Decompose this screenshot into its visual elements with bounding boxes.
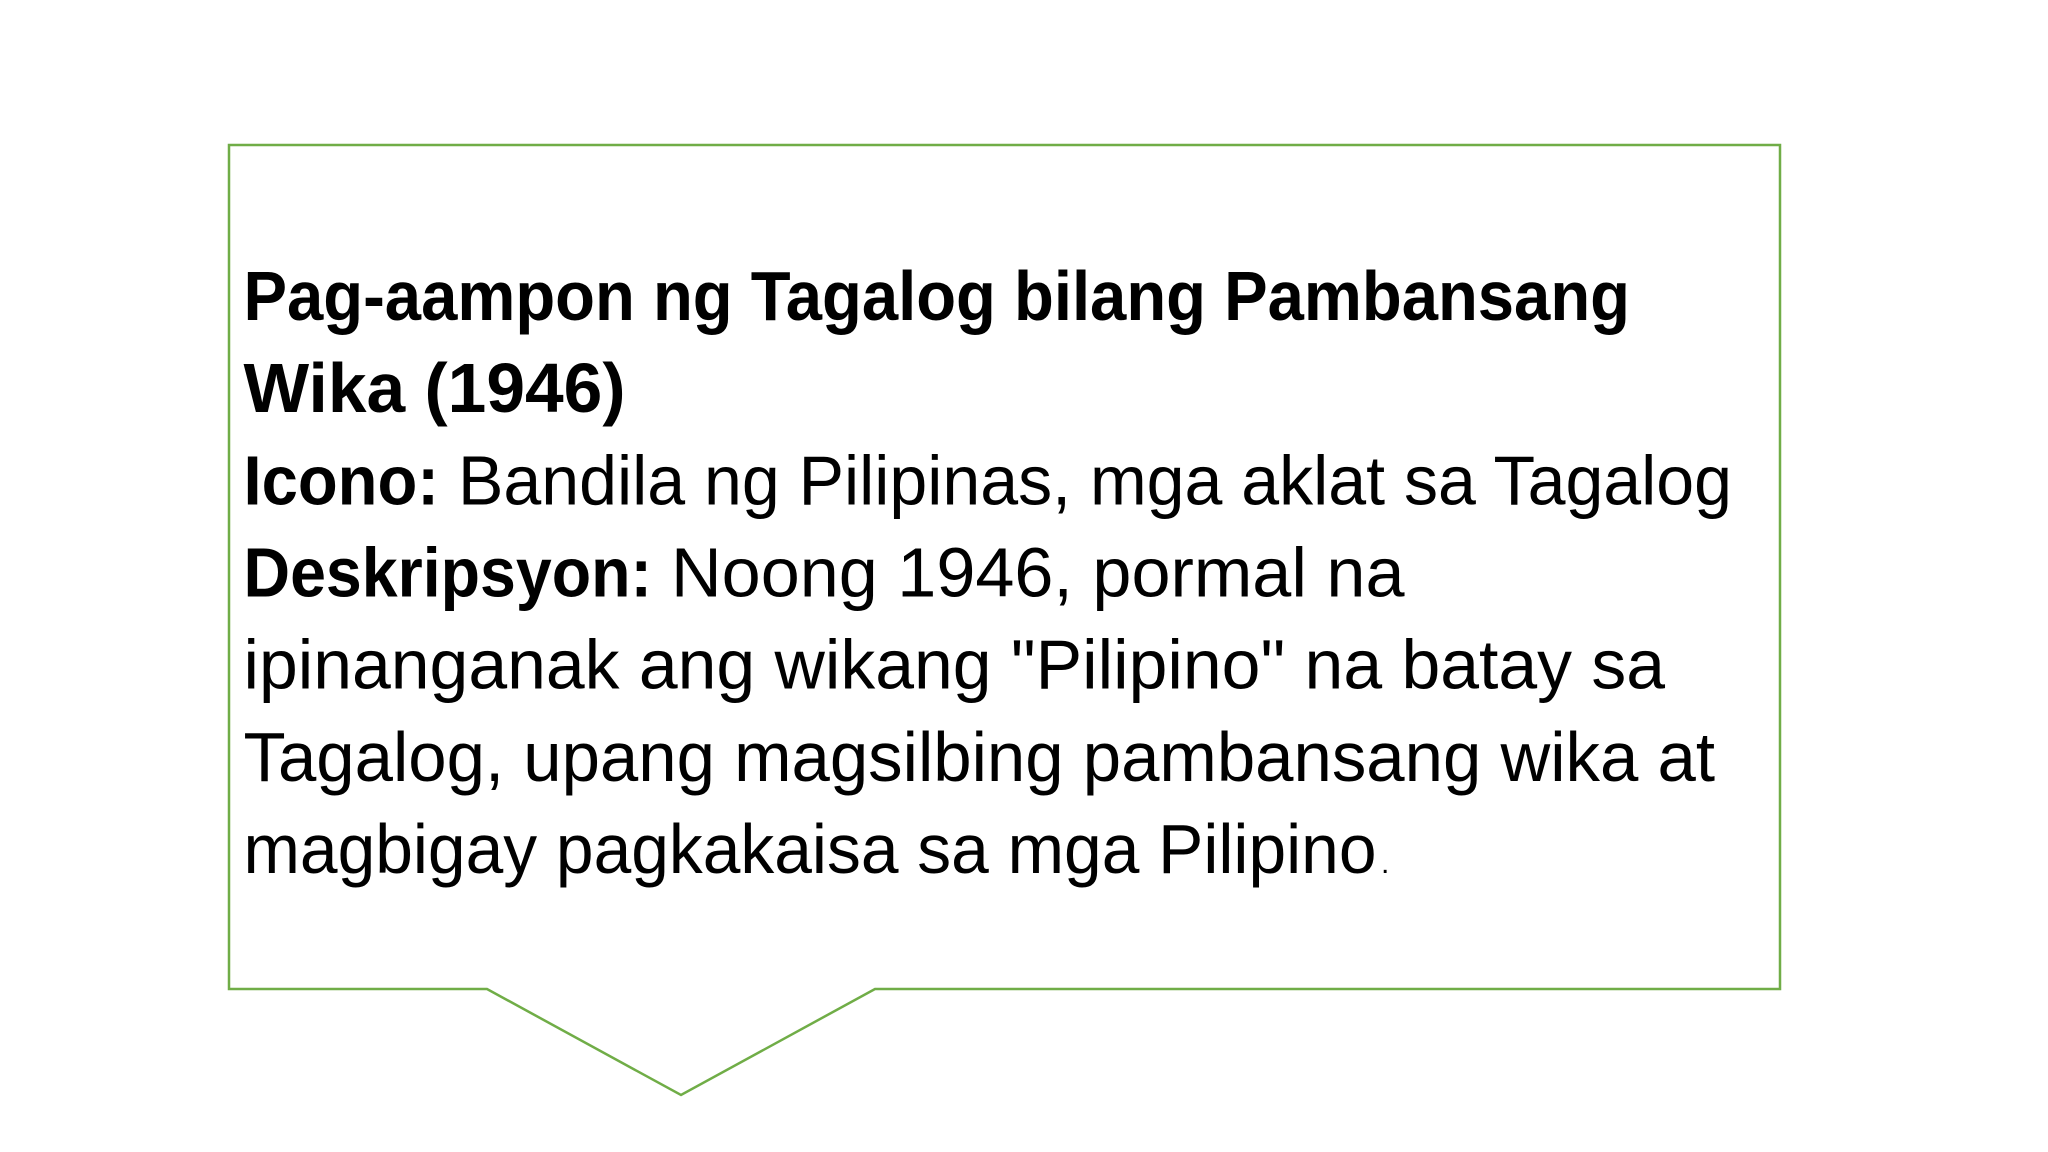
label: Icono: Icono: [244, 442, 439, 520]
text: description line 2: ipinanganak ang wikang "Pilipino" na batay sa [244, 626, 1665, 704]
text: small period: . [1381, 847, 1389, 880]
heading: line 1: Pag-aampon ng Tagalog bilang Pambansang [244, 257, 1630, 335]
text: description line 1: Noong 1946, pormal na [671, 534, 1405, 612]
text: description line 4: magbigay pagkakaisa sa mga Pilipino [244, 810, 1376, 888]
panel: callout box with downward pointer [229, 145, 1780, 1095]
text block: callout content [244, 257, 1732, 888]
text: Icono value: Bandila ng Pilipinas, mga aklat sa Tagalog [458, 442, 1732, 520]
label: Deskripsyon: Deskripsyon: [244, 534, 652, 612]
text: description line 3: Tagalog, upang magsilbing pambansang wika at [244, 718, 1715, 796]
heading: line 2: Wika (1946) [244, 349, 626, 427]
